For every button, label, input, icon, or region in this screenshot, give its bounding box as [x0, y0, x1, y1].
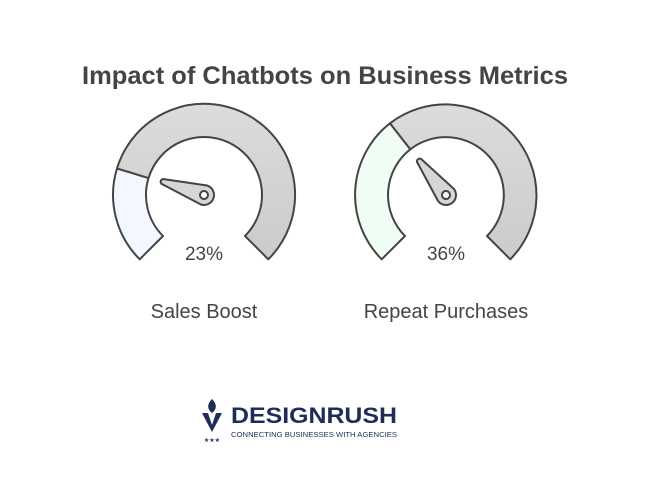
gauge 2 filled segment — [355, 123, 410, 259]
gauge 1 filled segment — [113, 168, 163, 259]
logo icon: ★★★ — [204, 437, 220, 444]
gauge 2 needle — [410, 153, 460, 209]
gauge 1 needle — [158, 171, 217, 208]
gauge: repeat purchases — [355, 104, 536, 259]
logo icon — [202, 399, 222, 444]
title: Impact of Chatbots on Business Metrics — [82, 62, 568, 90]
gauge 1 value: 23% — [185, 244, 223, 265]
gauge 2 value: 36% — [427, 244, 465, 265]
logo: designrush — [202, 399, 397, 444]
gauge 2 remaining segment — [390, 104, 536, 259]
gauge 1 remaining segment — [117, 104, 295, 259]
logo tagline: CONNECTING BUSINESSES WITH AGENCIES — [231, 430, 397, 439]
gauge: sales boost — [113, 104, 295, 259]
gauge 2 label: Repeat Purchases — [364, 301, 528, 323]
logo wordmark: DESIGNRUSH — [231, 403, 397, 428]
gauge 1 label: Sales Boost — [151, 301, 258, 323]
